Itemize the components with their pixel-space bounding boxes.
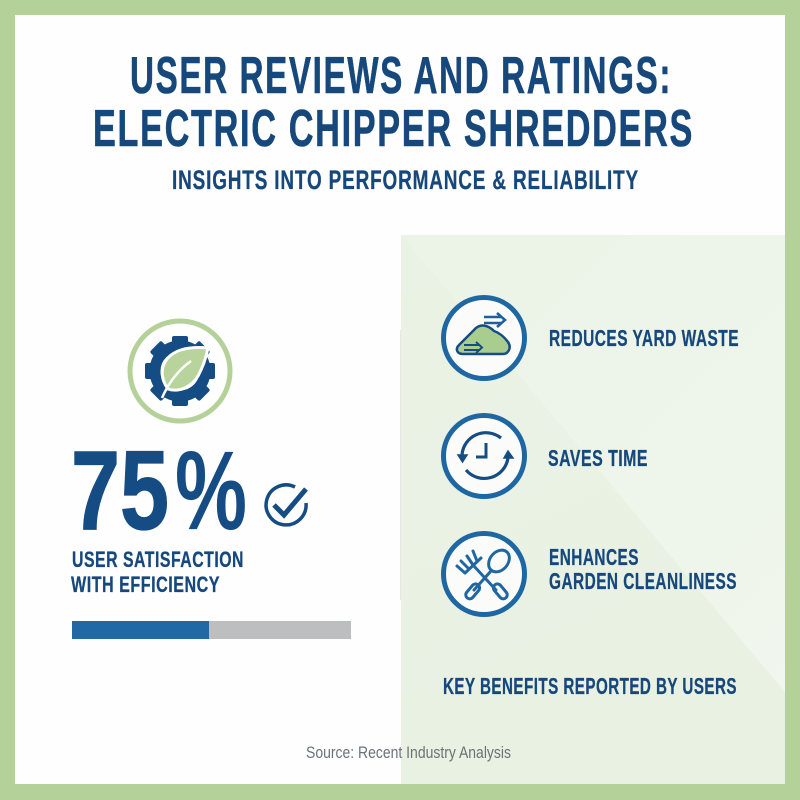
satisfaction label: USER SATISFACTION xyxy=(72,547,244,572)
icon: gear with leaf xyxy=(130,321,230,421)
satisfaction label xyxy=(71,547,244,597)
icon: yard waste xyxy=(444,298,524,378)
satisfaction label: WITH EFFICIENCY xyxy=(71,572,220,597)
icon: check mark xyxy=(266,485,306,525)
label: saves time: SAVES TIME xyxy=(548,445,648,471)
big percentage: 75 xyxy=(71,428,169,553)
label: enhances garden cleanliness xyxy=(549,544,737,594)
icon: garden tools xyxy=(444,534,524,614)
progress bar xyxy=(72,621,351,639)
icon: clock with arrows xyxy=(444,416,524,496)
source note: Source: Recent Industry Analysis xyxy=(306,743,511,762)
label: enhances garden cleanliness: ENHANCES xyxy=(549,544,639,570)
big percentage: % xyxy=(175,428,247,553)
title xyxy=(93,47,694,158)
panel: key benefits background xyxy=(400,235,785,784)
